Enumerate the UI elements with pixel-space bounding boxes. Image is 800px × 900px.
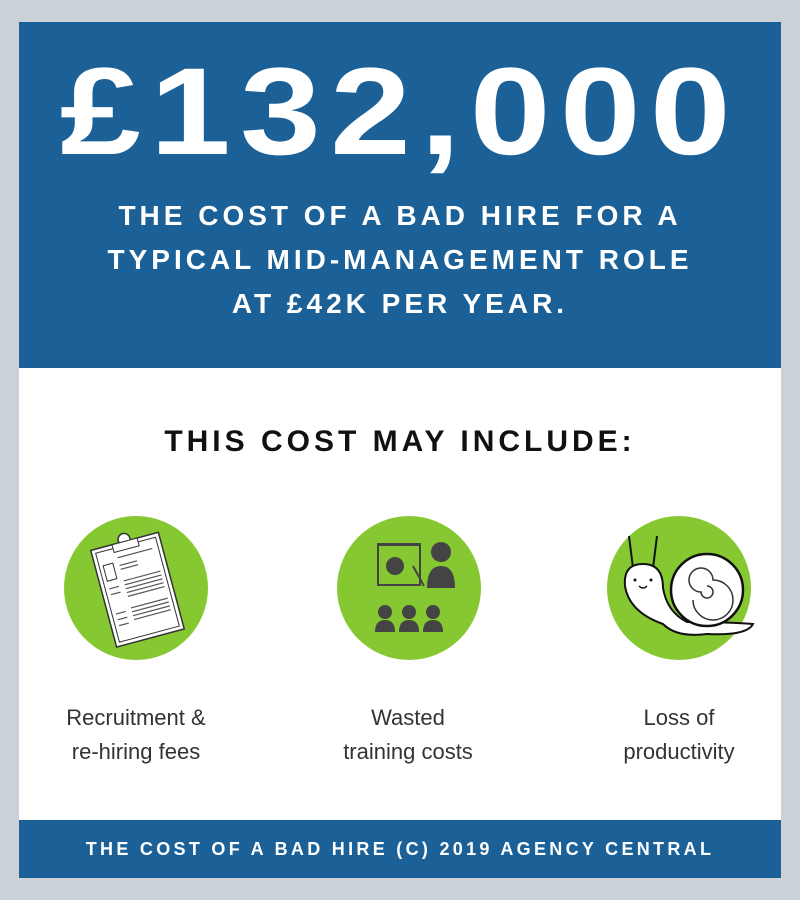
subtitle: THE COST OF A BAD HIRE FOR A [118, 200, 682, 231]
label: productivity: productivity [623, 739, 735, 764]
footer: THE COST OF A BAD HIRE (C) 2019 AGENCY CENTRAL [86, 839, 714, 859]
label: productivity [623, 705, 735, 764]
panel: top blue header [19, 22, 781, 368]
label: productivity: Loss of [644, 705, 714, 730]
subtitle: AT £42K PER YEAR. [232, 288, 568, 319]
footer [19, 820, 781, 878]
label: recruitment: Recruitment & [66, 705, 206, 730]
label: training: Wasted [371, 705, 445, 730]
subtitle: TYPICAL MID-MANAGEMENT ROLE [107, 244, 693, 275]
panel: white content [19, 368, 781, 820]
heading: THIS COST MAY INCLUDE: [164, 425, 636, 458]
label: training: training costs [343, 739, 473, 764]
title: big number: £132,000 [60, 43, 740, 181]
icon: snail [607, 516, 754, 660]
label: recruitment: re-hiring fees [72, 739, 200, 764]
icon: training presentation [337, 516, 481, 660]
icon: clipboard [64, 516, 208, 660]
label: training [343, 705, 473, 764]
label: recruitment [66, 705, 206, 764]
subtitle [107, 200, 693, 319]
